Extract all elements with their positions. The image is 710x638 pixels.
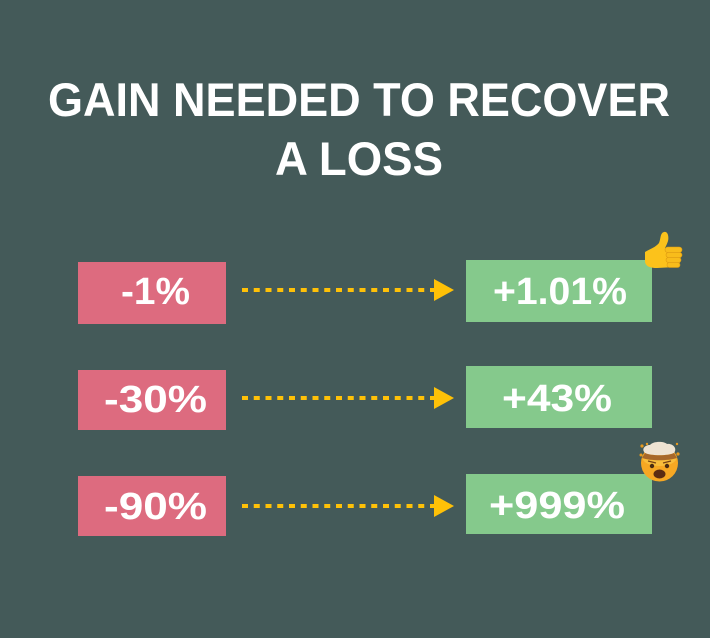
row 3: loss box: -90% — [104, 486, 207, 528]
icon: thumbs up — [645, 232, 682, 268]
row 3: gain box — [466, 474, 652, 534]
row 1: gain box: +1.01% — [493, 271, 627, 313]
title: GAIN NEEDED TO RECOVER — [48, 73, 670, 126]
row 2: gain box: +43% — [502, 378, 612, 420]
row 2: loss box — [78, 370, 226, 430]
row 3: loss box — [78, 476, 226, 536]
row 1: gain box — [466, 260, 652, 322]
row 2: arrow — [242, 387, 454, 409]
row 1: arrow — [242, 279, 454, 301]
icon: exploding head — [640, 442, 680, 482]
title: A LOSS — [275, 132, 443, 185]
row 3: arrow — [242, 495, 454, 517]
row 2: loss box: -30% — [104, 379, 207, 421]
title — [48, 73, 670, 185]
row 1: loss box — [78, 262, 226, 324]
row 2: gain box — [466, 366, 652, 428]
row 1: loss box: -1% — [121, 271, 190, 313]
row 3: gain box: +999% — [489, 485, 625, 527]
